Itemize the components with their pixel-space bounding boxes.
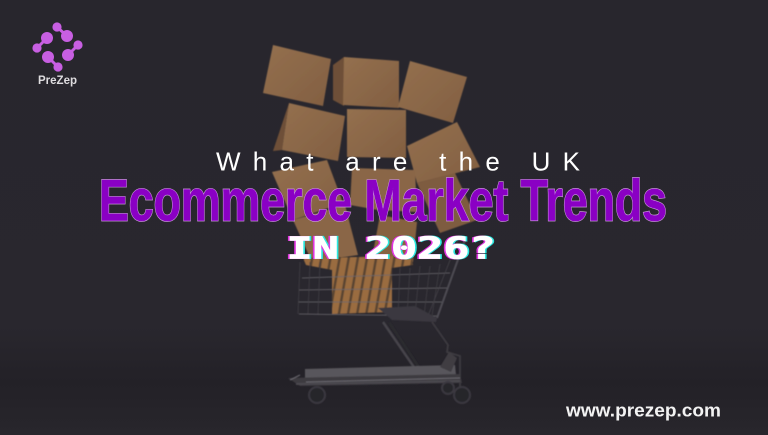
- title: line three with glitch effect: IN 2026?: [286, 232, 496, 266]
- box: second row right: [407, 122, 480, 183]
- box: fourth row left: [293, 205, 358, 262]
- cart contents: hatched cardboard: [303, 256, 413, 314]
- box: top right: [398, 61, 467, 123]
- title: line three with glitch effect: [285, 232, 497, 266]
- cart handle plate: [378, 306, 437, 322]
- falling cardboard boxes: [263, 45, 480, 262]
- box: third row left: [272, 160, 343, 220]
- box: third row right: [417, 173, 477, 233]
- shopping cart: [288, 240, 470, 403]
- cart wheels: [309, 382, 470, 403]
- box: top left: [263, 45, 331, 106]
- box: second row centre: [347, 109, 406, 158]
- icon: PreZep molecule mark: [32, 22, 83, 72]
- box: top centre: [333, 57, 399, 108]
- cart basket wires: [298, 240, 465, 318]
- box: second row left: [273, 103, 345, 161]
- title: line three with glitch effect: IN 2026?: [288, 232, 497, 266]
- logo wordmark: PreZep: [38, 75, 77, 87]
- logo: PreZep: [32, 22, 83, 87]
- title: line one: What are the UK: [216, 146, 581, 176]
- cart frame legs: [383, 322, 460, 395]
- title: line three with glitch effect: IN 2026?: [285, 232, 494, 266]
- cart lower tray: [288, 352, 462, 386]
- website URL: www.prezep.com: [565, 400, 721, 420]
- box: third row centre: [350, 168, 417, 212]
- box: fourth row centre: [372, 215, 417, 262]
